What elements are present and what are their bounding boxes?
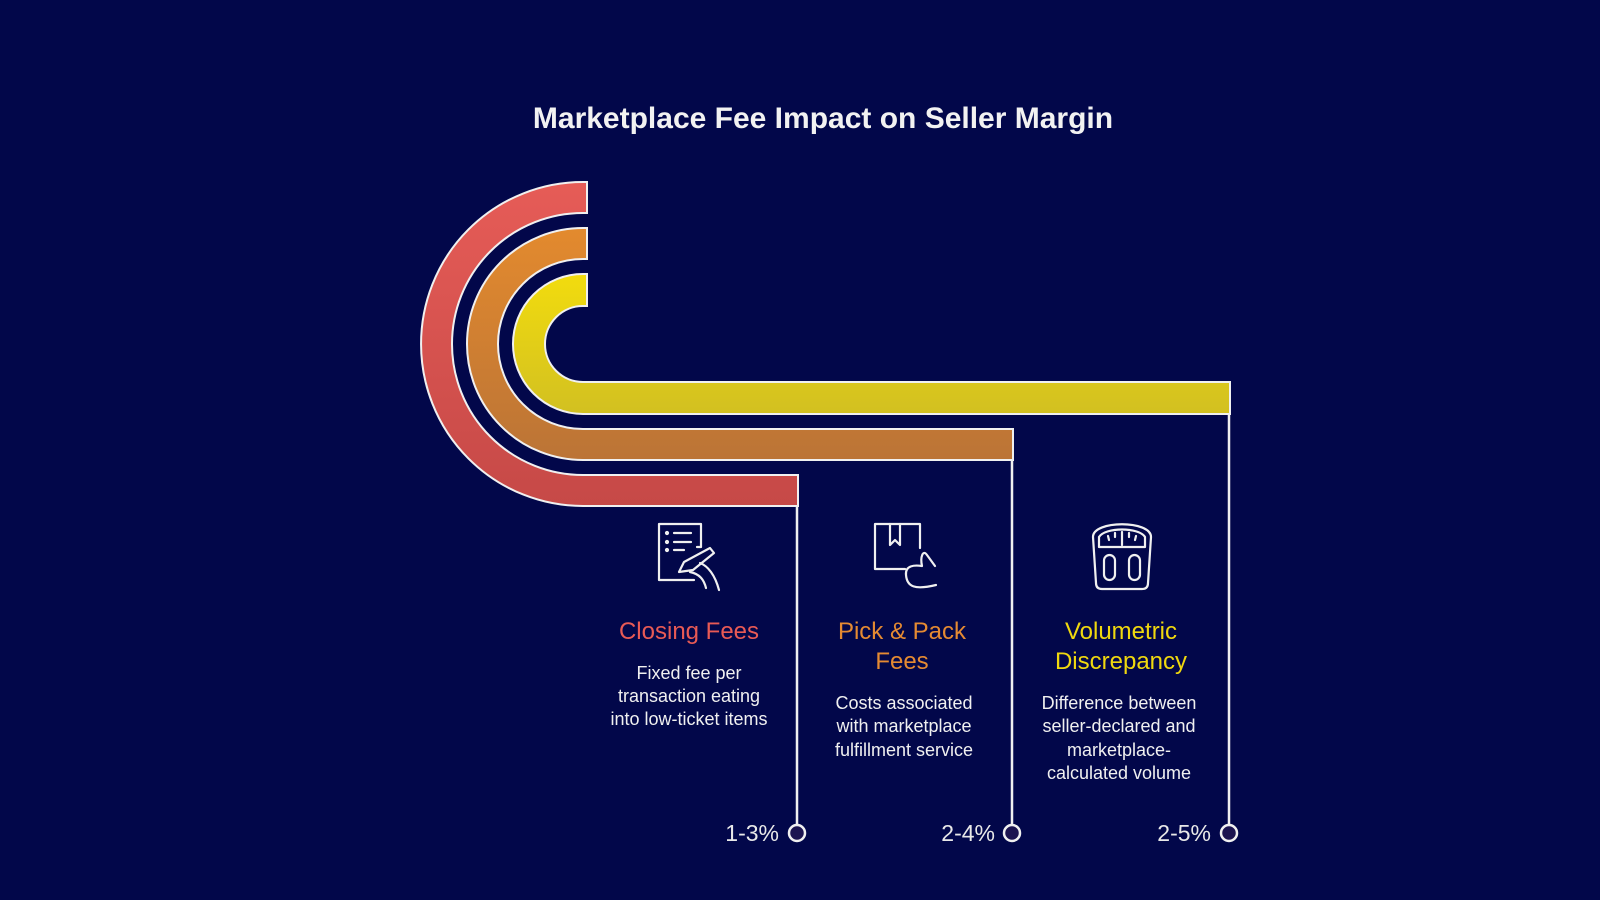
text: volumetric discrepancy: calculated volume bbox=[1047, 763, 1191, 783]
icon: box with hand bbox=[875, 524, 936, 587]
text: volumetric discrepancy: Difference between bbox=[1042, 693, 1196, 713]
percent labels: 1-3% bbox=[725, 820, 779, 846]
text: closing fees: transaction eating bbox=[618, 686, 760, 706]
title: Marketplace Fee Impact on Seller Margin bbox=[533, 102, 1113, 135]
text: pick & pack fees: Costs associated bbox=[835, 693, 973, 713]
percent labels: 2-4% bbox=[941, 820, 995, 846]
text: volumetric discrepancy: Discrepancy bbox=[1055, 648, 1187, 675]
text: volumetric discrepancy: seller-declared and bbox=[1042, 716, 1196, 736]
text: pick & pack fees: Fees bbox=[875, 648, 929, 675]
text: pick & pack fees: with marketplace bbox=[835, 716, 972, 736]
percent labels: 2-5% bbox=[1157, 820, 1211, 846]
text: closing fees: into low-ticket items bbox=[610, 709, 768, 729]
text: pick & pack fees bbox=[835, 618, 973, 760]
band: closing fees (red) bbox=[421, 182, 798, 506]
text: closing fees: Closing Fees bbox=[619, 618, 759, 645]
percent labels bbox=[725, 820, 1211, 846]
text: closing fees: Fixed fee per bbox=[636, 663, 742, 683]
text: pick & pack fees: fulfillment service bbox=[835, 740, 973, 760]
connector: yellow bbox=[1221, 414, 1237, 841]
band: volumetric (yellow) bbox=[513, 274, 1230, 414]
text: closing fees bbox=[610, 618, 768, 729]
connector: red bbox=[789, 506, 805, 841]
text: pick & pack fees: Pick & Pack bbox=[838, 618, 967, 645]
connector: orange bbox=[1004, 460, 1020, 841]
icon: weighing scale bbox=[1093, 524, 1151, 589]
text: volumetric discrepancy bbox=[1042, 618, 1196, 783]
icon: clipboard with pen bbox=[659, 524, 719, 590]
text: volumetric discrepancy: Volumetric bbox=[1065, 618, 1177, 645]
text: volumetric discrepancy: marketplace- bbox=[1067, 740, 1171, 760]
band: pick & pack (orange) bbox=[467, 228, 1013, 460]
